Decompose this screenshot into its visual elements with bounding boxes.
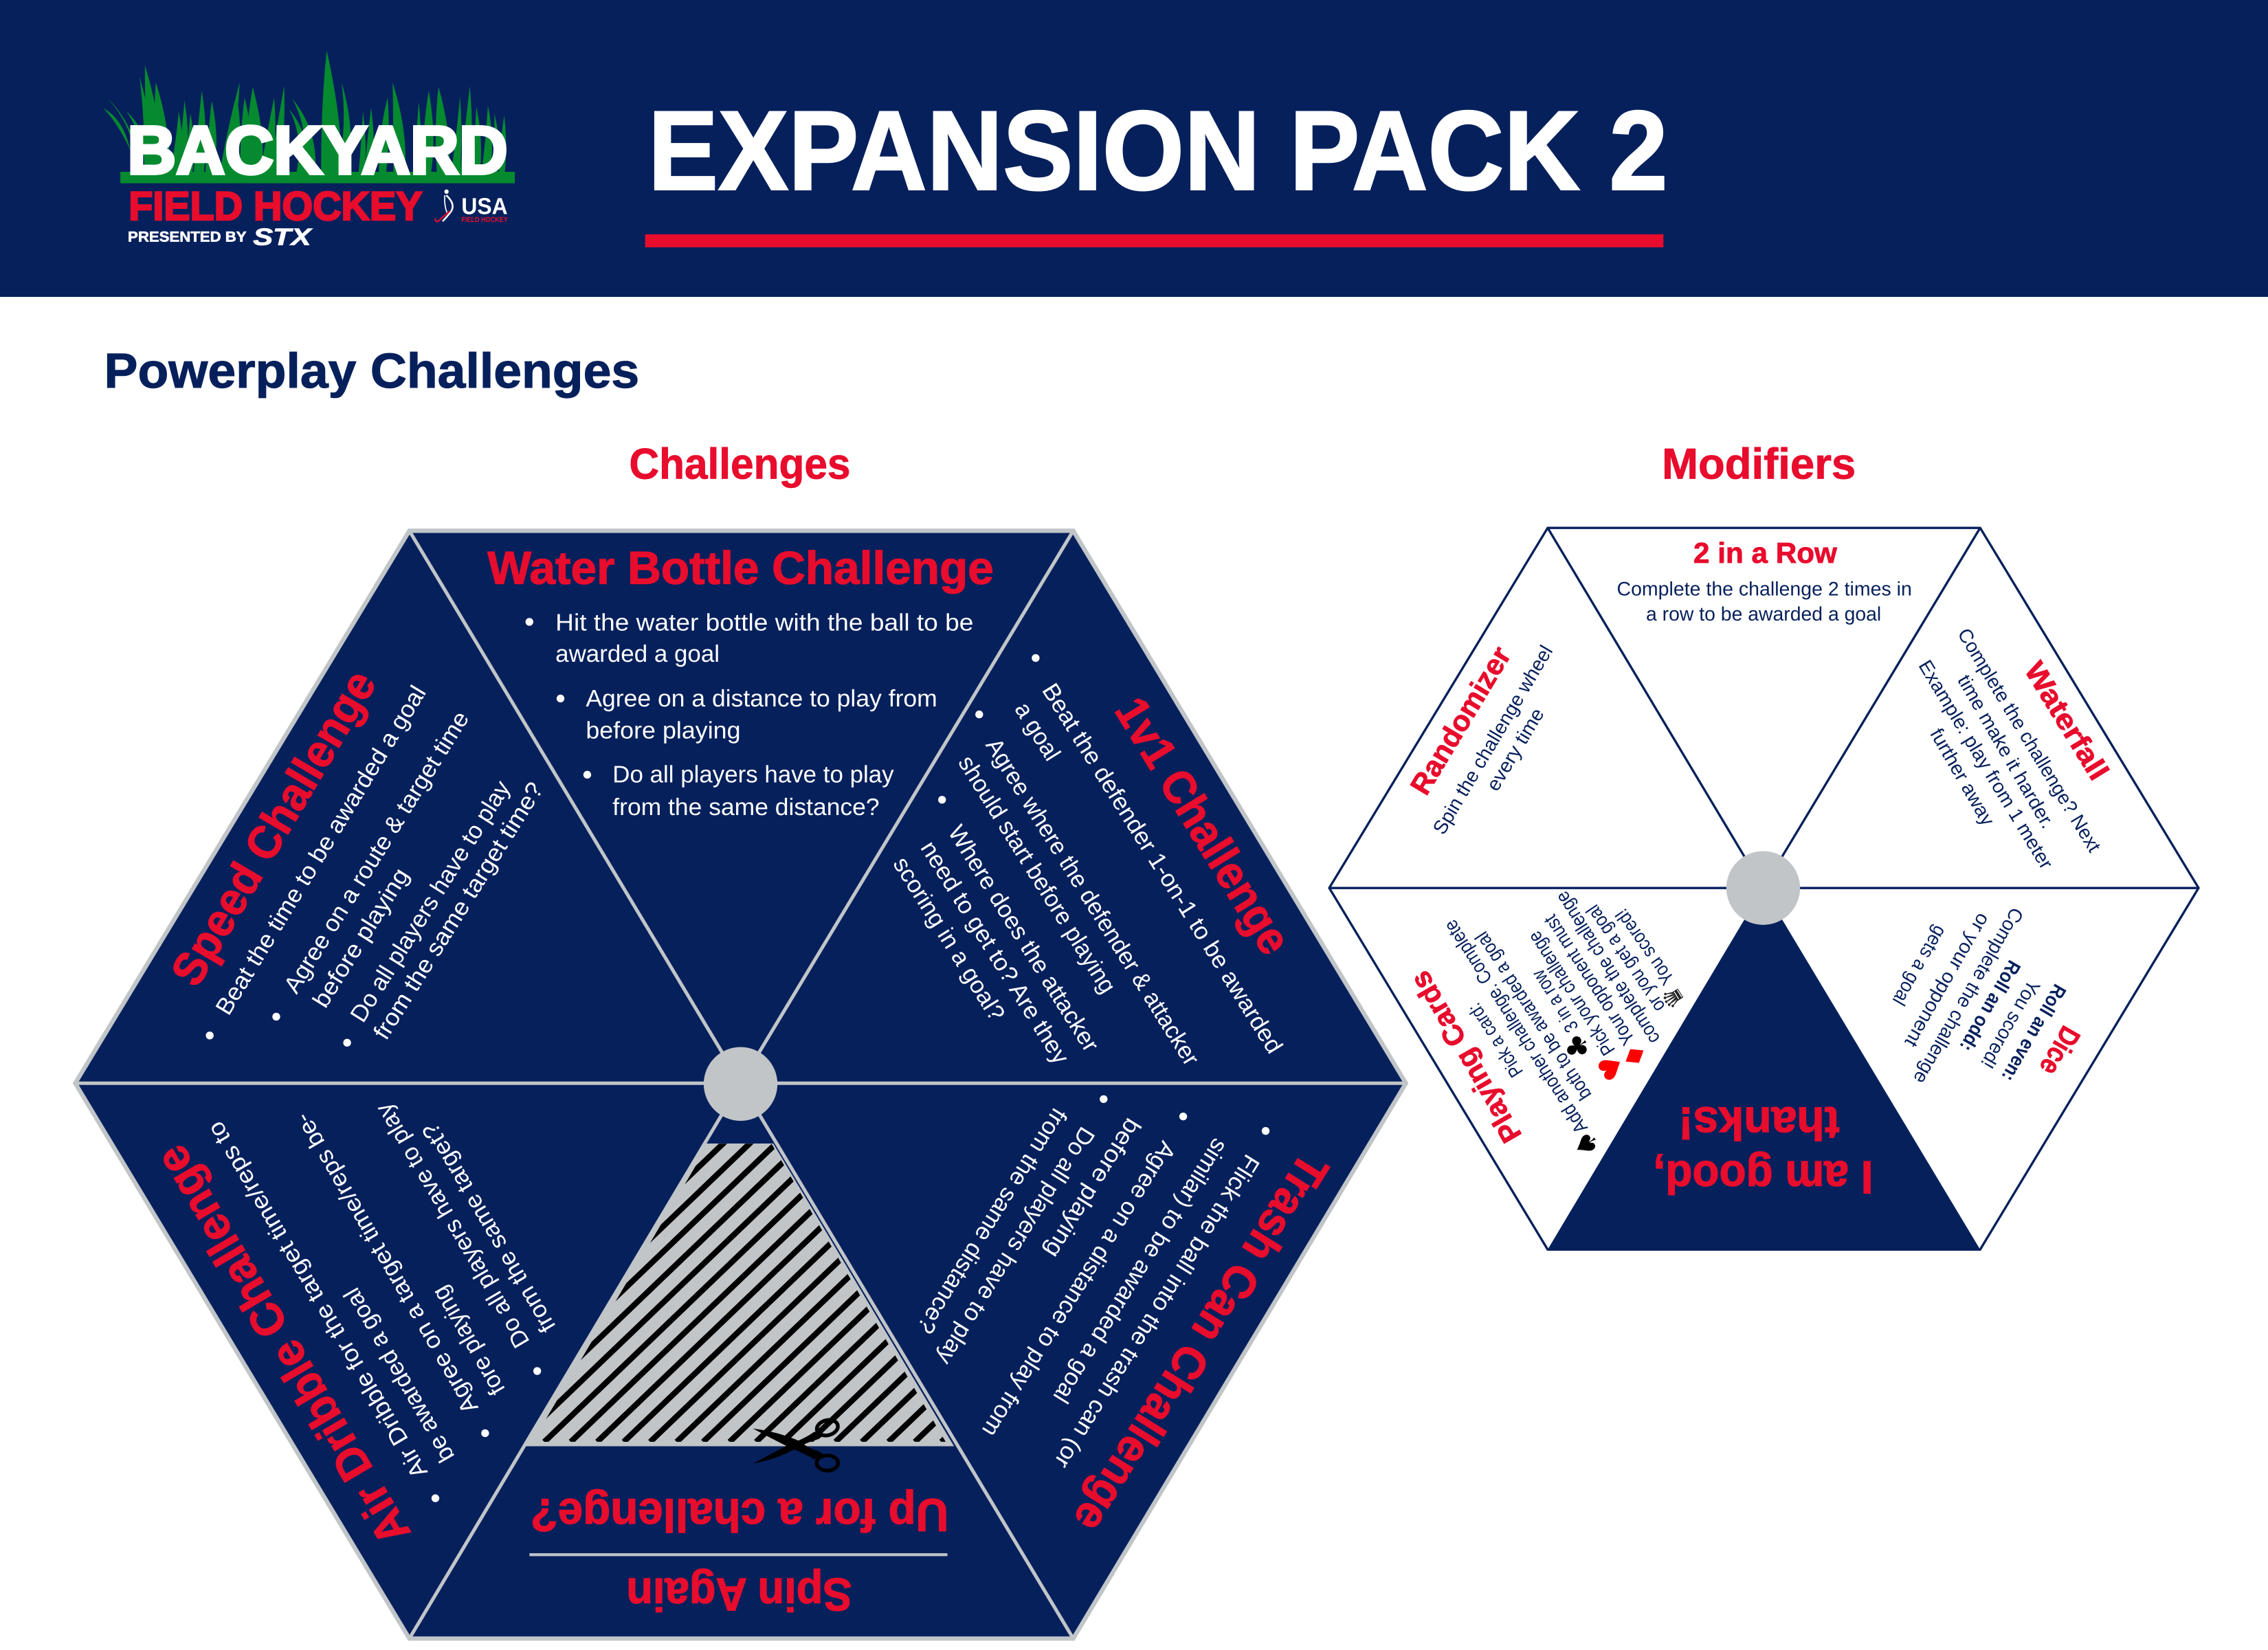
panel: modifiers wheel [1329,528,2199,1249]
segment: Trash Can Challenge: Do all players have to play [931,1122,1099,1370]
header band [0,0,2268,297]
segment: Playing Cards: You scored! [1610,905,1678,989]
segment: Up for a challenge / Spin Again: Up for a challenge? [531,1489,948,1541]
segment: Waterfall: Example: play from 1 meter [1914,656,2058,873]
icon: scissors [753,1418,840,1471]
segment: Waterfall: Waterfall [2017,657,2114,786]
title: EXPANSION PACK 2 [648,87,1668,214]
icon: card suits: ♦ [1613,1036,1656,1076]
segment: Air Dribble Challenge: Air Dribble Challenge [145,1137,420,1554]
segment: Water Bottle Challenge: Do all players have to play [612,762,895,788]
segment: Trash Can Challenge: Agree on a distance to play from [977,1137,1180,1441]
heading: Powerplay Challenges: Powerplay Challenges [104,344,639,399]
modifiers hub [1726,851,1800,925]
logo word: USA field hockey: FIELD HOCKEY [461,216,509,225]
segment: 2 in a Row: 2 in a Row [1693,538,1838,570]
segment: 1v1 Challenge: Where does the attacker [942,821,1104,1057]
segment: Dice: Roll an odd: [1955,957,2025,1055]
segment: Water Bottle Challenge: Water Bottle Challenge [487,542,994,594]
navy blocked triangle [1548,888,1980,1249]
icon: card suits [1555,980,1693,1164]
segment: Air Dribble Challenge: fore playing [427,1281,511,1400]
segment: Dice: gets a goal [1888,922,1951,1010]
segment: Trash Can Challenge: from the same distance? [911,1103,1071,1338]
segment: Trash Can Challenge [911,1095,1339,1541]
segment: Waterfall: further away [1926,724,1999,829]
wheel hexagon [75,531,1406,1638]
segment: 1v1 Challenge [887,654,1302,1071]
segment: Speed Challenge: Agree on a route & target time [279,707,475,998]
heading: Modifiers: Modifiers [1662,441,1856,489]
segment: Playing Cards: Pick a card: [1463,999,1527,1081]
segment: Waterfall: time make it harder. [1953,671,2059,832]
segment: Water Bottle Challenge: awarded a goal [555,642,720,667]
segment: Air Dribble Challenge: Do all players have to play [370,1097,535,1352]
segment: 1v1 Challenge: need to get to? Are they [915,837,1074,1070]
logo word: BACKYARD: BACKYARD [127,111,508,188]
logo grass [103,50,515,183]
segment: 1v1 Challenge: 1v1 Challenge [1105,688,1302,963]
icon: card suits: ♛ [1656,980,1693,1014]
segment: I am good, thanks! [1654,1097,1873,1203]
panel: challenges wheel [75,531,1406,1638]
segment: Water Bottle Challenge: from the same distance? [612,794,880,821]
segment: Water Bottle Challenge: Hit the water bottle with the ball to be [555,610,973,636]
logo word: presented by: PRESENTED BY [128,230,247,246]
segment: 2 in a Row: a row to be awarded a goal [1646,603,1881,625]
segment: Air Dribble Challenge: Air Dribble for the target time/reps to [203,1117,433,1482]
segment: 1v1 Challenge: should start before playing [953,751,1120,999]
segment: I am good, thanks!: I am good, [1654,1151,1873,1203]
modifiers spokes [1329,528,2199,888]
segment: 1v1 Challenge: scoring in a goal? [887,853,1010,1026]
segment: Trash Can Challenge: Trash Can Challenge [1064,1144,1339,1541]
icon: card suits: ♣ [1555,1027,1599,1067]
segment: Water Bottle Challenge: before playing [586,718,741,744]
segment: Playing Cards: 3 in a row [1527,966,1583,1036]
logo word: STX: STX [253,225,313,251]
segment: Up for a challenge / Spin Again [529,1489,948,1620]
wheel spokes [75,531,1406,1638]
segment: Air Dribble Challenge: Agree on a target time/reps be- [290,1108,484,1418]
segment: Dice [1888,904,2085,1088]
logo word: FIELD HOCKEY: FIELD HOCKEY [129,183,423,229]
segment: I am good, thanks!: thanks! [1678,1097,1840,1149]
wheel hub [704,1047,777,1121]
segment: Air Dribble Challenge: be awarded a goal [339,1283,460,1467]
segment: Speed Challenge: from the same target time? [369,778,549,1045]
segment: Playing Cards: or you get a goal [1581,901,1669,1016]
segment: 1v1 Challenge: a goal [1009,698,1065,766]
segment: Playing Cards: Pick your challenge [1524,927,1619,1060]
segment: 1v1 Challenge: Beat the defender 1-on-1 to be awarded [1036,679,1287,1058]
modifiers hexagon [1329,528,2199,1249]
segment: 2 in a Row: Complete the challenge 2 times in [1617,578,1912,600]
segment: 2 in a Row [1617,538,1912,625]
segment: Speed Challenge: before playing [309,864,414,1012]
segment: Speed Challenge: Speed Challenge [161,661,386,994]
segment: Playing Cards: complete the challenge [1551,887,1664,1048]
segment: Randomizer: Spin the challenge wheel [1429,642,1557,838]
title underline [645,234,1663,247]
segment: Playing Cards: Playing Cards [1405,965,1528,1148]
segment: Dice: Roll an even: [1997,981,2070,1085]
logo word: USA: USA [461,195,509,220]
segment: Water Bottle Challenge: Agree on a distance to play from [586,686,937,712]
striped cut-out triangle [526,1144,954,1446]
segment: Speed Challenge: Beat the time to be awarded a goal [211,682,432,1020]
segment: Playing Cards: Your opponent must [1539,911,1639,1049]
segment: Dice: You scored! [1977,977,2045,1072]
segment: Water Bottle Challenge [487,542,994,821]
logo: Backyard Field Hockey [103,50,515,251]
icon: card suits: ♥ [1590,1047,1633,1087]
segment: Trash Can Challenge: before playing [1039,1113,1146,1262]
segment: Dice: or your opponent [1900,910,1994,1051]
segment: 1v1 Challenge: Agree where the defender & attacker [980,734,1204,1071]
segment: Air Dribble Challenge: from the same target? [418,1118,562,1337]
segment: Air Dribble Challenge [145,1097,562,1554]
segment: Dice: Dice [2032,1021,2085,1080]
segment: Playing Cards [1405,887,1693,1164]
segment: Trash Can Challenge: similar) to be awarded a goal [1047,1134,1232,1407]
icon: card suits: ♠ [1565,1124,1608,1164]
segment: Speed Challenge [161,661,549,1047]
segment: Playing Cards: both to be awarded a goal [1471,928,1596,1104]
icon: USA Field Hockey player [435,190,453,222]
segment: Randomizer: Randomizer [1405,641,1518,801]
segment: Up for a challenge / Spin Again: Spin Again [626,1568,852,1620]
segment: Playing Cards: Add another challenge. Complete [1440,916,1592,1137]
segment: Speed Challenge: Do all players have to play [346,776,516,1027]
segment: Dice: Complete the challenge [1909,904,2027,1088]
segment: Randomizer: every time [1482,704,1548,795]
heading: Challenges: Challenges [629,441,851,489]
segment: Trash Can Challenge: Flick the ball into the trash can (or [1048,1150,1264,1473]
segment: Waterfall: Complete the challenge? Next [1953,625,2105,856]
